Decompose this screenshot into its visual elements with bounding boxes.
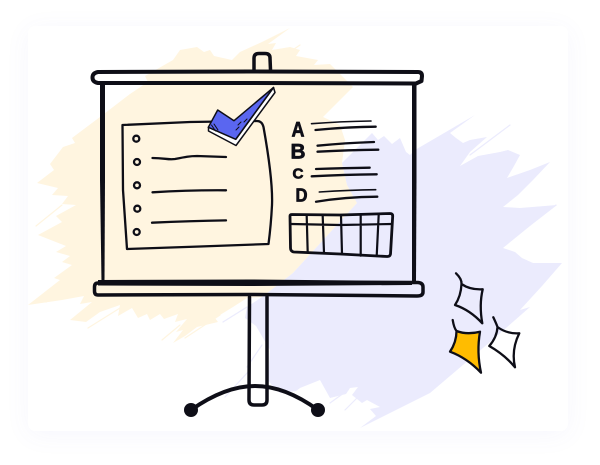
gold sparkle xyxy=(450,320,481,373)
letter A: A xyxy=(292,118,304,142)
top mount knob xyxy=(254,54,270,70)
base arc xyxy=(191,386,318,410)
letter B: B xyxy=(290,140,306,164)
list lines xyxy=(152,156,226,223)
stand xyxy=(184,297,325,417)
right sparkle xyxy=(489,317,519,367)
left screen edge xyxy=(100,84,105,282)
letter C: C xyxy=(292,166,304,182)
checklist paper xyxy=(122,121,272,249)
check face xyxy=(208,88,274,139)
top roller xyxy=(92,72,422,84)
yellow brush stroke xyxy=(28,28,357,343)
sparkles xyxy=(450,273,519,373)
top sparkle xyxy=(455,273,483,323)
letter D: D xyxy=(296,186,308,206)
lavender brush stroke xyxy=(223,115,562,428)
card background xyxy=(28,26,568,431)
projector screen frame xyxy=(92,54,423,296)
right screen edge xyxy=(412,84,416,282)
paper outline xyxy=(122,121,272,249)
check glints xyxy=(212,119,247,131)
table outline xyxy=(290,214,393,257)
table grid xyxy=(292,214,392,256)
check mark xyxy=(208,88,275,146)
answer lines xyxy=(312,121,378,202)
bullets xyxy=(133,136,140,235)
pole xyxy=(249,297,267,405)
check side xyxy=(208,88,275,146)
table xyxy=(290,214,393,257)
left foot xyxy=(184,403,198,417)
answer letters xyxy=(290,118,308,206)
right foot xyxy=(311,403,325,417)
bottom roller xyxy=(94,282,423,296)
